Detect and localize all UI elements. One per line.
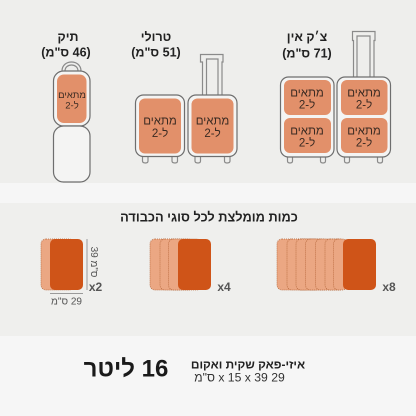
icon: check-in suitcase: מתאים	[290, 88, 324, 100]
heading: trolley: (51 ס"מ)	[131, 46, 181, 60]
heading: trolley	[131, 30, 181, 60]
icon: backpack: ל-2	[65, 100, 79, 112]
heading: check-in: (71 ס"מ)	[282, 46, 332, 60]
icon: check-in suitcase: ל-2	[299, 98, 315, 112]
heading: check-in	[282, 30, 332, 60]
heading: trolley: טרולי	[141, 30, 171, 44]
volume: 16 ליטר	[84, 356, 168, 382]
panel: product summary	[84, 356, 305, 384]
panel: recommended quantity	[41, 210, 396, 308]
icon: check-in suitcase: מתאים	[290, 126, 324, 138]
stack: two bags with dimensions: x2	[89, 280, 102, 294]
heading: recommended quantity: כמות מומלצת לכל סוגי הכבודה	[120, 210, 298, 224]
heading: backpack	[41, 30, 91, 60]
icon: check-in suitcase: ל-2	[356, 98, 372, 112]
stack: eight bags: x8	[382, 280, 396, 294]
product name: איזי-פאק שקית ואקום	[191, 358, 305, 372]
icon: backpack	[54, 62, 90, 182]
stack: four bags: x4	[217, 280, 231, 294]
icon: trolley suitcase: מתאים	[196, 116, 229, 128]
icon: trolley suitcase	[136, 54, 237, 163]
icon: trolley suitcase: ל-2	[152, 127, 168, 140]
icon: check-in suitcase	[280, 32, 390, 163]
icon: trolley suitcase: מתאים	[143, 116, 177, 128]
panel: carry-on types	[41, 30, 390, 182]
icon: check-in suitcase: ל-2	[299, 136, 315, 150]
stack: two bags with dimensions: 39 ס"מ	[88, 247, 99, 278]
icon: backpack: מתאים	[58, 90, 86, 101]
icon: check-in suitcase: מתאים	[347, 88, 381, 100]
stack: two bags with dimensions: 29 ס"מ	[51, 296, 82, 308]
icon: check-in suitcase: ל-2	[356, 136, 372, 150]
stack: four bags	[150, 239, 231, 294]
stack: two bags with dimensions	[41, 239, 102, 308]
icon: check-in suitcase: מתאים	[347, 126, 381, 138]
heading: backpack: (46 ס"מ)	[41, 46, 91, 60]
heading: backpack: תיק	[58, 30, 78, 44]
heading: check-in: צ׳ק אין	[287, 30, 328, 44]
icon: trolley suitcase: ל-2	[204, 127, 221, 140]
dimensions: 29 x 15 x 39 ס"מ	[194, 370, 285, 384]
stack: eight bags	[277, 239, 396, 294]
